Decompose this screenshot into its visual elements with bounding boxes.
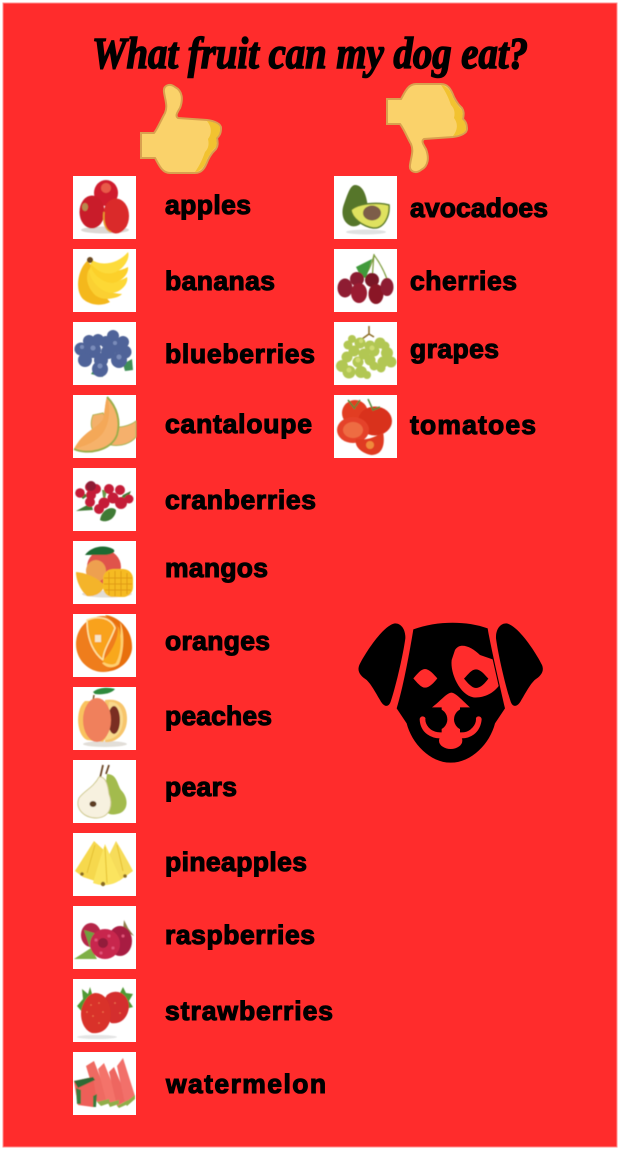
label: watermelon: watermelon xyxy=(165,1069,326,1099)
label: apples: apples xyxy=(165,190,251,220)
label: strawberries: strawberries xyxy=(165,996,333,1026)
label: bananas: bananas xyxy=(165,266,275,296)
tile: mango xyxy=(73,541,136,604)
label: cranberries: cranberries xyxy=(165,485,316,515)
tile: watermelon xyxy=(73,1052,136,1115)
tile: cantaloupe xyxy=(73,395,136,458)
tile: tomatoes xyxy=(334,395,397,458)
label: pears: pears xyxy=(165,772,237,802)
tile: orange xyxy=(73,614,136,677)
tile: pear xyxy=(73,760,136,823)
tile: apples xyxy=(73,176,136,239)
label: oranges: oranges xyxy=(165,626,270,656)
label: peaches: peaches xyxy=(165,701,272,731)
icon: thumbs down xyxy=(387,84,467,172)
tile: blueberries xyxy=(73,322,136,385)
label: avocadoes: avocadoes xyxy=(410,193,548,223)
label: cherries: cherries xyxy=(410,266,517,296)
tile: peach xyxy=(73,687,136,750)
label: grapes: grapes xyxy=(410,334,499,364)
label: tomatoes: tomatoes xyxy=(410,410,536,440)
label: cantaloupe: cantaloupe xyxy=(165,409,312,439)
tile: bananas xyxy=(73,249,136,312)
tile: avocado xyxy=(334,176,397,239)
icon: dog face xyxy=(358,623,543,763)
tile: grapes xyxy=(334,322,397,385)
tile: pineapple xyxy=(73,833,136,896)
label: pineapples: pineapples xyxy=(165,847,307,877)
label: mangos: mangos xyxy=(165,553,268,583)
tile: strawberries xyxy=(73,979,136,1042)
label: blueberries: blueberries xyxy=(165,339,315,369)
tile: raspberries xyxy=(73,906,136,969)
title: What fruit can my dog eat? xyxy=(92,29,528,78)
label: raspberries: raspberries xyxy=(165,920,315,950)
icon: thumbs up xyxy=(141,85,221,173)
tile: cranberries xyxy=(73,468,136,531)
tile: cherries xyxy=(334,249,397,312)
